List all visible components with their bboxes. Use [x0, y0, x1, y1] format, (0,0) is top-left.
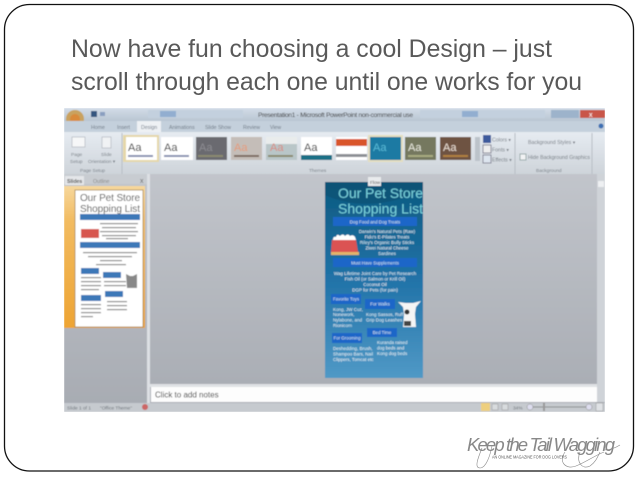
blue slide: Grip Dog Leashes	[366, 318, 403, 322]
theme thumbnails: Aa	[408, 142, 422, 154]
slides panel: Shopping List	[80, 204, 140, 215]
slides panel: x	[140, 178, 144, 185]
status bar: 34%	[513, 406, 523, 412]
blue slide	[325, 177, 423, 378]
logo: Keep the Tail Wagging: Keep the Tail Wagging	[467, 434, 616, 455]
theme thumbnails: Aa	[304, 142, 318, 154]
ribbon: Page Setup	[80, 168, 105, 174]
blue slide: Flow	[370, 180, 381, 186]
title	[71, 36, 582, 96]
blue slide: Kong dog beds	[377, 351, 408, 356]
blue slide: Our Pet Store	[338, 185, 423, 201]
blue slide: Dog Food and Dog Treats	[350, 220, 401, 224]
status bar	[64, 403, 605, 412]
blue slide: Bed Time	[373, 330, 392, 335]
logo: Keep the Tail Wagging: AN ONLINE MAGAZINE FOR DOG LOVERS	[492, 454, 567, 460]
blue slide: Deshedding, Brush,	[333, 346, 373, 351]
blue slide: Nylabone, and	[333, 318, 363, 322]
blue slide: dog beds and	[377, 346, 405, 350]
ribbon: Slide	[101, 152, 112, 158]
theme thumbnails: Aa	[128, 142, 142, 154]
theme thumbnails: Aa	[234, 142, 248, 154]
PowerPoint screenshot	[64, 108, 605, 412]
blue slide: Favorite Toys	[333, 296, 360, 302]
ribbon tabs: Home	[91, 125, 105, 131]
theme thumbnails: Aa	[164, 142, 178, 154]
blue slide: Wag Lifetime Joint Care by Pet Research	[334, 271, 417, 276]
blue slide: Nonework,	[333, 312, 355, 317]
blue slide: Kong, JW Cuz,	[333, 307, 363, 312]
status bar: "Office Theme"	[100, 406, 132, 412]
ribbon tabs: Insert	[117, 125, 131, 131]
blue slide: DGP for Pets (for pain)	[352, 288, 398, 292]
title bar	[64, 108, 605, 128]
logo: Keep the Tail Wagging	[467, 434, 620, 468]
slides panel: Our Pet Store	[80, 193, 140, 204]
title: Now have fun choosing a cool Design – just	[71, 36, 552, 63]
notes pane: Click to add notes	[155, 390, 219, 400]
blue slide: Kong Sassos, Ruff	[366, 312, 404, 317]
blue slide: Shampoo Bars, Nail	[333, 352, 373, 356]
notes pane	[150, 174, 605, 402]
blue slide: Fido's E-Pilates Treats	[365, 234, 410, 240]
ribbon: Themes	[309, 168, 327, 174]
theme thumbnails: Aa	[199, 142, 213, 154]
dog icon	[398, 301, 421, 327]
blue slide: Clippers, Tomcat etc	[333, 357, 374, 362]
ribbon: Setup	[70, 159, 83, 165]
ribbon options: Effects ▾	[492, 158, 512, 164]
window background	[64, 108, 605, 412]
ribbon options	[483, 135, 590, 164]
ribbon: Page	[71, 152, 83, 158]
blue slide: Rionicorn	[333, 323, 353, 328]
blue slide: For Grooming	[333, 336, 361, 340]
ribbon	[64, 132, 605, 174]
ribbon tabs: Slide Show	[205, 125, 231, 131]
theme thumbnails: Aa	[270, 142, 284, 154]
ribbon options: Hide Background Graphics	[528, 155, 590, 161]
status bar: Slide 1 of 1	[67, 406, 91, 412]
ribbon options: Background Styles ▾	[528, 140, 576, 146]
title bar: Presentation1 - Microsoft PowerPoint non-commercial use	[258, 112, 413, 119]
blue slide: For Walks	[370, 302, 391, 306]
dog bowl icon	[331, 234, 359, 255]
blue slide: Sardines	[378, 251, 397, 256]
blue slide: Fish Oil (or Salmon or Krill Oil)	[345, 276, 406, 282]
slides panel	[64, 174, 150, 412]
ribbon tabs	[64, 121, 605, 133]
blue slide: Darwin's Natural Pets (Raw)	[359, 229, 416, 234]
slides panel: Slides	[67, 179, 82, 185]
ribbon tabs: Design	[141, 125, 157, 131]
blue slide: Ziwei Natural Cheese	[365, 246, 409, 250]
ribbon tabs: View	[270, 125, 281, 131]
blue slide: Riley's Organic Bully Sticks	[360, 240, 415, 245]
blue slide: Coconut Oil	[363, 282, 387, 287]
ribbon: Orientation ▾	[88, 159, 116, 165]
slides panel: Outline	[93, 179, 110, 185]
theme thumbnails: Aa	[373, 142, 387, 154]
theme thumbnails: Aa	[443, 142, 457, 154]
ribbon tabs: Animations	[169, 125, 195, 131]
theme thumbnails	[123, 135, 480, 162]
ribbon: Background	[536, 168, 562, 174]
title bar: x	[589, 112, 593, 119]
blue slide: Shopping List	[338, 200, 423, 216]
blue slide: Kuranda raised	[377, 340, 408, 345]
ribbon options: Fonts ▾	[492, 148, 509, 154]
ribbon options: Colors ▾	[492, 138, 511, 144]
ribbon tabs: Review	[243, 125, 260, 131]
title: scroll through each one until one works for you	[71, 69, 582, 96]
blue slide: Must Have Supplements	[351, 260, 400, 266]
